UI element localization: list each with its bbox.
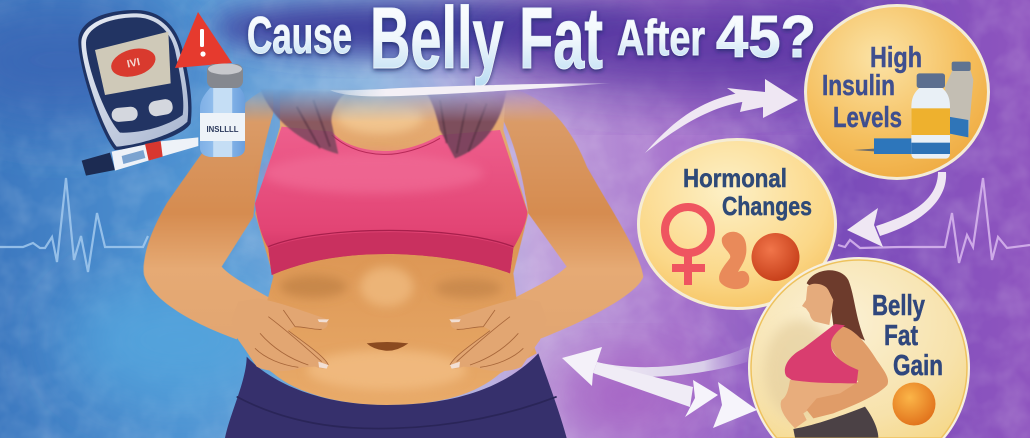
meter buttons bbox=[111, 106, 138, 122]
hair strands bbox=[260, 88, 507, 158]
icon: glucose meter: IVI bbox=[126, 56, 141, 71]
icon: syringe bbox=[82, 137, 198, 176]
ECG line left bbox=[0, 178, 148, 272]
title: After bbox=[617, 10, 705, 66]
label: Hormonal Changes bbox=[683, 163, 812, 221]
icon: apple bbox=[752, 233, 800, 281]
label: Hormonal Changes: Hormonal bbox=[683, 163, 787, 193]
right arm bbox=[500, 87, 643, 340]
icon: glucose meter bbox=[78, 10, 192, 150]
panel: belly fat gain bbox=[748, 257, 970, 438]
title bbox=[247, 0, 816, 87]
navel bbox=[367, 342, 408, 351]
label: Belly Fat Gain: Fat bbox=[884, 320, 918, 352]
icon: insulin vial bbox=[200, 64, 245, 157]
title: 45? bbox=[716, 4, 816, 70]
left arm bbox=[144, 87, 273, 339]
screen bbox=[95, 32, 171, 95]
label: Belly Fat Gain bbox=[872, 290, 943, 382]
arrow: to high insulin bbox=[645, 79, 798, 153]
label: Belly Fat Gain: Belly bbox=[872, 290, 925, 322]
panel: high insulin levels bbox=[804, 4, 990, 180]
title: Cause bbox=[247, 7, 352, 65]
bra bbox=[255, 127, 527, 275]
skin shading bbox=[280, 100, 502, 390]
shorts bbox=[225, 353, 567, 438]
label: High Insulin Levels: Levels bbox=[833, 102, 902, 134]
label: High Insulin Levels: High bbox=[870, 42, 922, 74]
label: High Insulin Levels bbox=[822, 42, 922, 134]
icon: female symbol bbox=[665, 207, 711, 285]
woman in profile bbox=[781, 270, 888, 438]
arrow: double-headed lower arrows bbox=[562, 346, 757, 428]
icon: orange fruit bbox=[892, 382, 936, 426]
title underline swoosh bbox=[330, 83, 612, 96]
ECG line right bbox=[838, 178, 1030, 263]
panel: hormonal changes bbox=[637, 138, 837, 310]
torso skin bbox=[250, 80, 537, 405]
right hand bbox=[449, 298, 547, 371]
vial label text: INSLLLL bbox=[206, 124, 238, 134]
icon: warning triangle bbox=[175, 12, 232, 68]
arrow: insulin to hormonal bbox=[847, 172, 946, 247]
label: High Insulin Levels: Insulin bbox=[822, 70, 895, 102]
label: Belly Fat Gain: Gain bbox=[893, 350, 943, 382]
icon: ovary organ bbox=[719, 232, 749, 289]
screen reading bbox=[108, 44, 159, 81]
icon: insulin bottles and syringe bbox=[853, 62, 973, 159]
label: Hormonal Changes: Changes bbox=[722, 191, 812, 221]
left hand bbox=[232, 298, 329, 371]
